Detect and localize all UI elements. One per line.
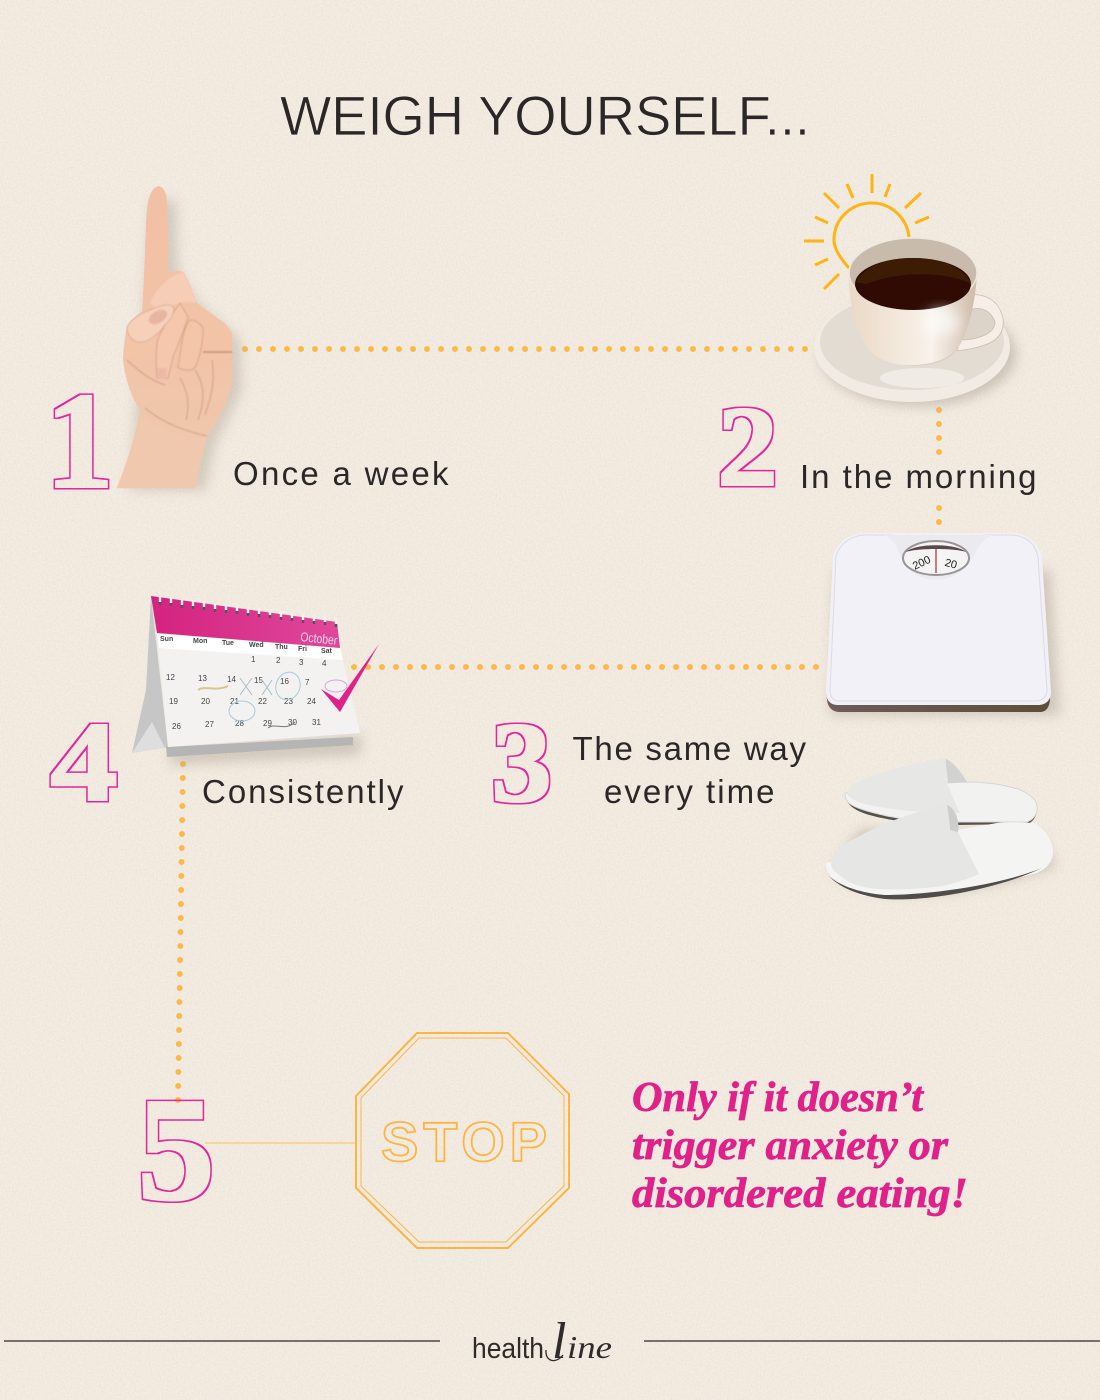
step 2: in the morning — [717, 174, 1038, 510]
scale dial: 200 — [911, 554, 933, 573]
number 3: 3 — [491, 699, 552, 826]
warning text: Only if it doesn’t — [632, 1075, 924, 1121]
calendar dates: Sun — [160, 636, 173, 643]
scale dial: 20 — [943, 557, 958, 572]
calendar month: October — [300, 629, 339, 648]
calendar dates: Sat — [321, 648, 333, 655]
dotted connector: step 2 to scale, lower — [936, 508, 942, 523]
calendar dates: Tue — [222, 640, 234, 647]
step 3: the same way every time — [491, 533, 1060, 899]
calendar dates: Mon — [193, 638, 207, 645]
scale dial — [903, 541, 969, 575]
healthline logo: l — [552, 1313, 566, 1370]
calendar dates: 7 — [305, 678, 310, 687]
icon: sun — [804, 174, 929, 289]
healthline logo — [472, 1313, 612, 1370]
front slipper — [826, 822, 1053, 899]
warning text: trigger anxiety or — [632, 1123, 949, 1169]
healthline logo: ine — [567, 1329, 612, 1365]
calendar dates: 27 — [205, 720, 214, 729]
step 1: once a week — [45, 186, 450, 517]
calendar dates: Thu — [275, 644, 288, 651]
dotted connector: step 3 to step 4 — [352, 664, 816, 670]
calendar dates: 2 — [276, 656, 281, 665]
icon: bathroom scale — [826, 533, 1060, 715]
calendar dates: 31 — [312, 718, 321, 727]
calendar dates: 14 — [227, 675, 236, 684]
calendar dates: 29 — [263, 719, 272, 728]
dotted connector: step 4 to step 5 — [178, 763, 183, 1100]
number 1: 1 — [45, 364, 114, 517]
calendar dates: 23 — [284, 697, 293, 706]
calendar dates: 22 — [258, 697, 267, 706]
warning text: disordered eating! — [632, 1171, 968, 1217]
icon: stop sign — [356, 1033, 569, 1248]
calendar dates: 1 — [251, 655, 256, 664]
step 4: consistently — [50, 596, 405, 825]
icon: desk calendar — [132, 596, 379, 765]
stop text: STOP — [381, 1110, 547, 1173]
title: WEIGH YOURSELF... — [280, 84, 810, 147]
icon: coffee cup and saucer — [814, 238, 1016, 406]
calendar dates: Fri — [298, 646, 307, 653]
footer with healthline logo — [4, 1313, 1100, 1370]
number 4: 4 — [50, 698, 118, 825]
label: in the morning: In the morning — [800, 458, 1038, 495]
number 2: 2 — [717, 383, 778, 510]
dotted connector: step 2 to scale, upper — [936, 410, 942, 453]
calendar dates: 16 — [280, 677, 289, 686]
calendar dates: 4 — [322, 659, 327, 668]
label: once a week: Once a week — [233, 455, 450, 492]
calendar dates: 12 — [166, 673, 175, 682]
calendar dates: 3 — [299, 658, 304, 667]
step 5: stop warning — [137, 1033, 968, 1248]
calendar spiral rings — [160, 596, 336, 627]
calendar dates: 26 — [172, 722, 181, 731]
calendar handwriting marks — [198, 669, 347, 728]
label: the same way every time: every time — [604, 773, 776, 810]
number 5: 5 — [137, 1068, 215, 1232]
label: consistently: Consistently — [202, 773, 405, 810]
label: the same way every time: The same way — [572, 730, 808, 767]
calendar dates: 24 — [307, 697, 316, 706]
healthline logo: health — [472, 1333, 544, 1365]
connector line to stop sign — [205, 1142, 356, 1144]
calendar dates — [160, 636, 333, 731]
calendar dates: 28 — [235, 719, 244, 728]
calendar dates: Wed — [249, 642, 264, 649]
pink check mark — [321, 644, 379, 712]
dotted connector: step 1 to step 2 — [231, 346, 805, 352]
icon: white slippers — [826, 758, 1056, 899]
calendar dates: 21 — [230, 697, 239, 706]
calendar dates: 20 — [201, 697, 210, 706]
calendar dates: 13 — [198, 674, 207, 683]
label: the same way every time — [572, 730, 808, 810]
calendar dates: 30 — [288, 718, 297, 727]
icon: raised finger hand — [117, 186, 242, 490]
calendar dates: 19 — [169, 697, 178, 706]
warning text — [632, 1075, 968, 1217]
calendar dates: 15 — [254, 676, 263, 685]
back slipper — [845, 795, 1037, 825]
